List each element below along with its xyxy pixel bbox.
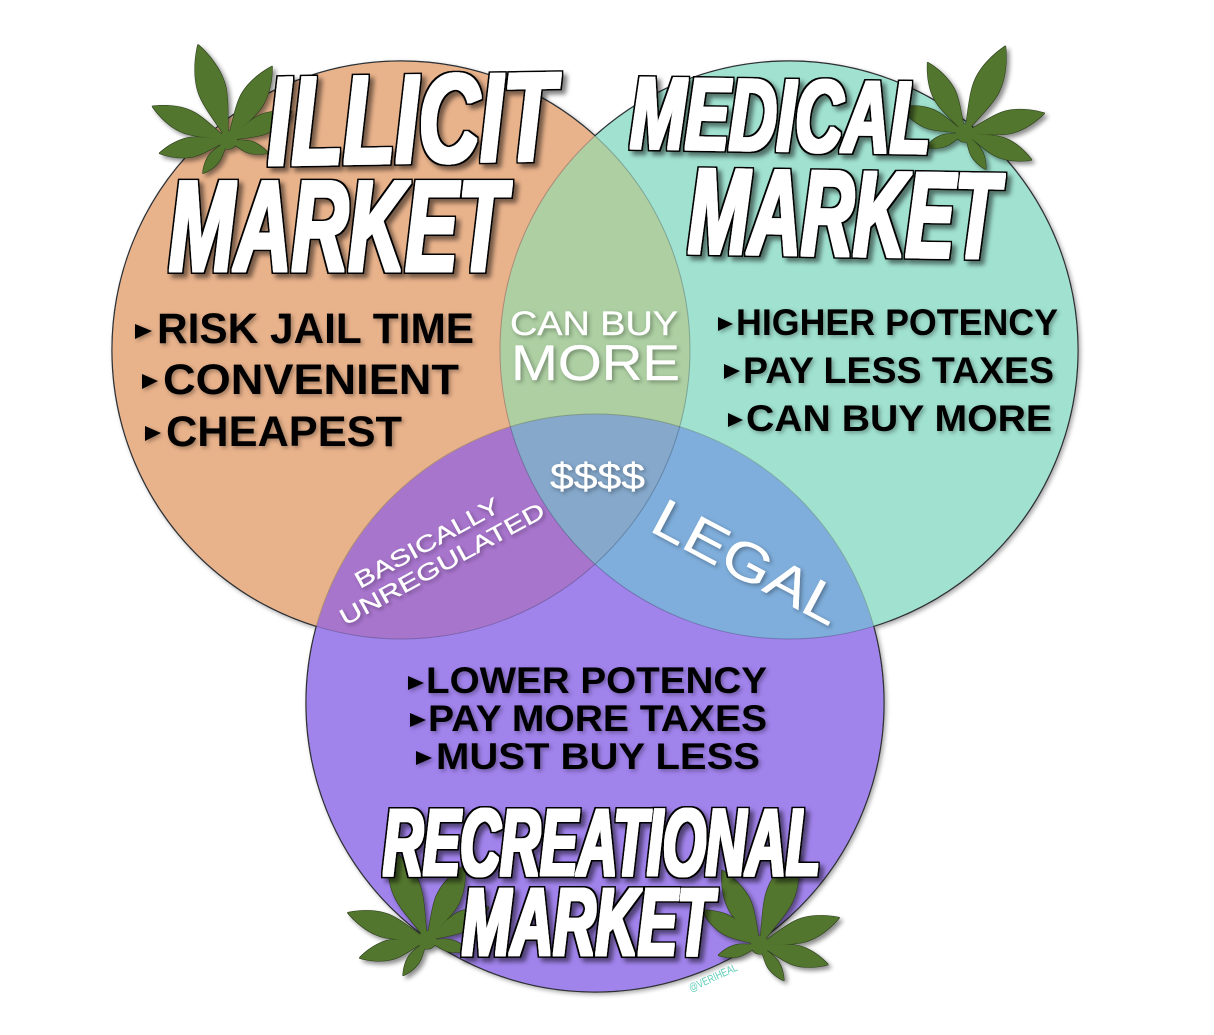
text block: medical market traits: HIGHER POTENCY [736,302,1058,343]
icon: leaf bottom right [697,847,843,984]
circle: illicit market [112,62,690,638]
text block: recreational market traits: MUST BUY LESS [436,736,760,777]
text block: illicit market traits: CHEAPEST [166,408,402,456]
text block: recreational market traits: LOWER POTENCY [426,660,767,701]
text block: medical market traits [718,302,1058,439]
overlap: medical and recreational [510,414,874,639]
label: basically unregulated: UNREGULATED [335,497,549,630]
overlap: illicit and recreational [316,414,679,639]
title: illicit market: ILLICIT [266,47,563,193]
icon: leaf top left [147,40,296,177]
title: recreational market: RECREATIONAL [383,789,820,895]
title: recreational market: MARKET [462,868,717,976]
text block: recreational market traits: PAY MORE TAXES [428,698,767,739]
text block: illicit market traits: RISK JAIL TIME [157,305,474,353]
label: basically unregulated: BASICALLY [350,492,504,593]
title: medical market [630,57,1005,285]
title: illicit market [169,47,563,299]
label: basically unregulated [335,492,549,630]
credit: veriheal: @VERIHEAL [687,962,739,995]
title: recreational market [383,789,820,976]
overlap: center [510,414,679,564]
circle: recreational market [306,414,884,992]
text block: recreational market traits [408,660,767,777]
icon: leaf top right [896,40,1047,172]
label: can buy more: MORE [511,335,680,391]
icon: leaf bottom left [344,842,493,979]
overlap: illicit and medical [500,136,690,427]
venn diagram [112,61,1078,992]
text block: illicit market traits: CONVENIENT [163,356,459,404]
label: dollar signs: $$$$ [550,456,645,497]
text block: medical market traits: CAN BUY MORE [746,398,1052,439]
title: medical market: MARKET [688,143,1005,285]
circle: medical market [500,62,1078,638]
label: legal: LEGAL [642,488,852,637]
label: can buy more [510,305,680,391]
label: can buy more: CAN BUY [510,305,678,343]
title: illicit market: MARKET [169,153,512,299]
text block: illicit market traits [135,305,474,456]
text block: medical market traits: PAY LESS TAXES [743,350,1054,391]
title: medical market: MEDICAL [630,57,932,175]
